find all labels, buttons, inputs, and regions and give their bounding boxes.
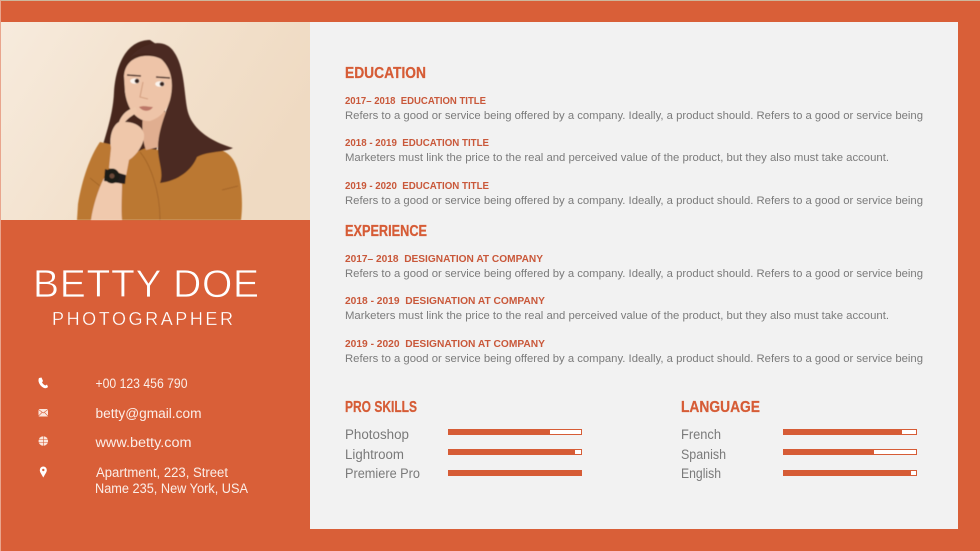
left hair behind [97, 40, 165, 180]
heading: pro skills: PRO SKILLS [345, 399, 417, 416]
language: English: English [681, 466, 721, 481]
entry 3 title: 2019 - 2020 DESIGNATION AT COMPANY [345, 338, 545, 350]
entry 3 text: Refers to a good or service being offered by a company. Ideally, a product should. Refers to a good or service being [345, 195, 923, 207]
address: Name 235, New York, USA [95, 481, 248, 496]
heading: experience: EXPERIENCE [345, 223, 427, 240]
entry 2 text: Marketers must link the price to the real and perceived value of the product, but they also must take account. [345, 152, 889, 164]
entry 2 text: Marketers must link the price to the real and perceived value of the product, but they also must take account. [345, 310, 889, 322]
address: Apartment, 223, Street [96, 465, 228, 480]
language: English [681, 466, 916, 481]
skill: Lightroom: Lightroom [345, 447, 404, 462]
icon: location pin [40, 467, 47, 478]
language: French: French [681, 427, 721, 442]
heading: education: EDUCATION [345, 65, 426, 82]
section: experience [345, 223, 923, 365]
shirt [77, 142, 242, 220]
skill: Premiere Pro: Premiere Pro [345, 466, 420, 481]
website: www.betty.com [94, 435, 192, 450]
entry 3 text: Refers to a good or service being offered by a company. Ideally, a product should. Refers to a good or service being [345, 353, 923, 365]
contact list [38, 376, 248, 496]
heading: language: LANGUAGE [681, 399, 760, 416]
section: language [681, 399, 916, 481]
neck [142, 112, 166, 150]
phone number: +00 123 456 790 [96, 376, 188, 391]
panel: main content [310, 22, 958, 529]
entry 2 title: 2018 - 2019 EDUCATION TITLE [345, 137, 489, 149]
photo: woman thinking [1, 22, 310, 220]
entry 1 text: Refers to a good or service being offered by a company. Ideally, a product should. Refers to a good or service being [345, 110, 923, 122]
entry 1 title: 2017– 2018 DESIGNATION AT COMPANY [345, 253, 543, 265]
language: French [681, 427, 916, 442]
watch [104, 169, 126, 184]
icon: mail [38, 409, 48, 416]
entry 1 title: 2017– 2018 EDUCATION TITLE [345, 95, 486, 107]
arm and hand [109, 107, 144, 176]
eyebrows and eyes [127, 75, 170, 78]
language: Spanish: Spanish [681, 447, 726, 462]
skill: Photoshop: Photoshop [345, 427, 409, 442]
skill: Photoshop [345, 427, 582, 442]
icon: globe [38, 436, 48, 446]
skill: Lightroom [345, 447, 582, 462]
face [124, 56, 174, 121]
job title: PHOTOGRAPHER [52, 309, 233, 329]
icon: phone [38, 378, 48, 388]
name: BETTY DOE [33, 263, 259, 306]
entry 3 title: 2019 - 2020 EDUCATION TITLE [345, 180, 489, 192]
skill: Premiere Pro [345, 466, 582, 481]
section: pro skills [345, 399, 582, 481]
section: education [345, 65, 923, 207]
right hair front [130, 43, 233, 183]
entry 1 text: Refers to a good or service being offered by a company. Ideally, a product should. Refers to a good or service being [345, 268, 923, 280]
language: Spanish [681, 447, 916, 462]
entry 2 title: 2018 - 2019 DESIGNATION AT COMPANY [345, 295, 545, 307]
email: betty@gmail.com [96, 406, 202, 421]
